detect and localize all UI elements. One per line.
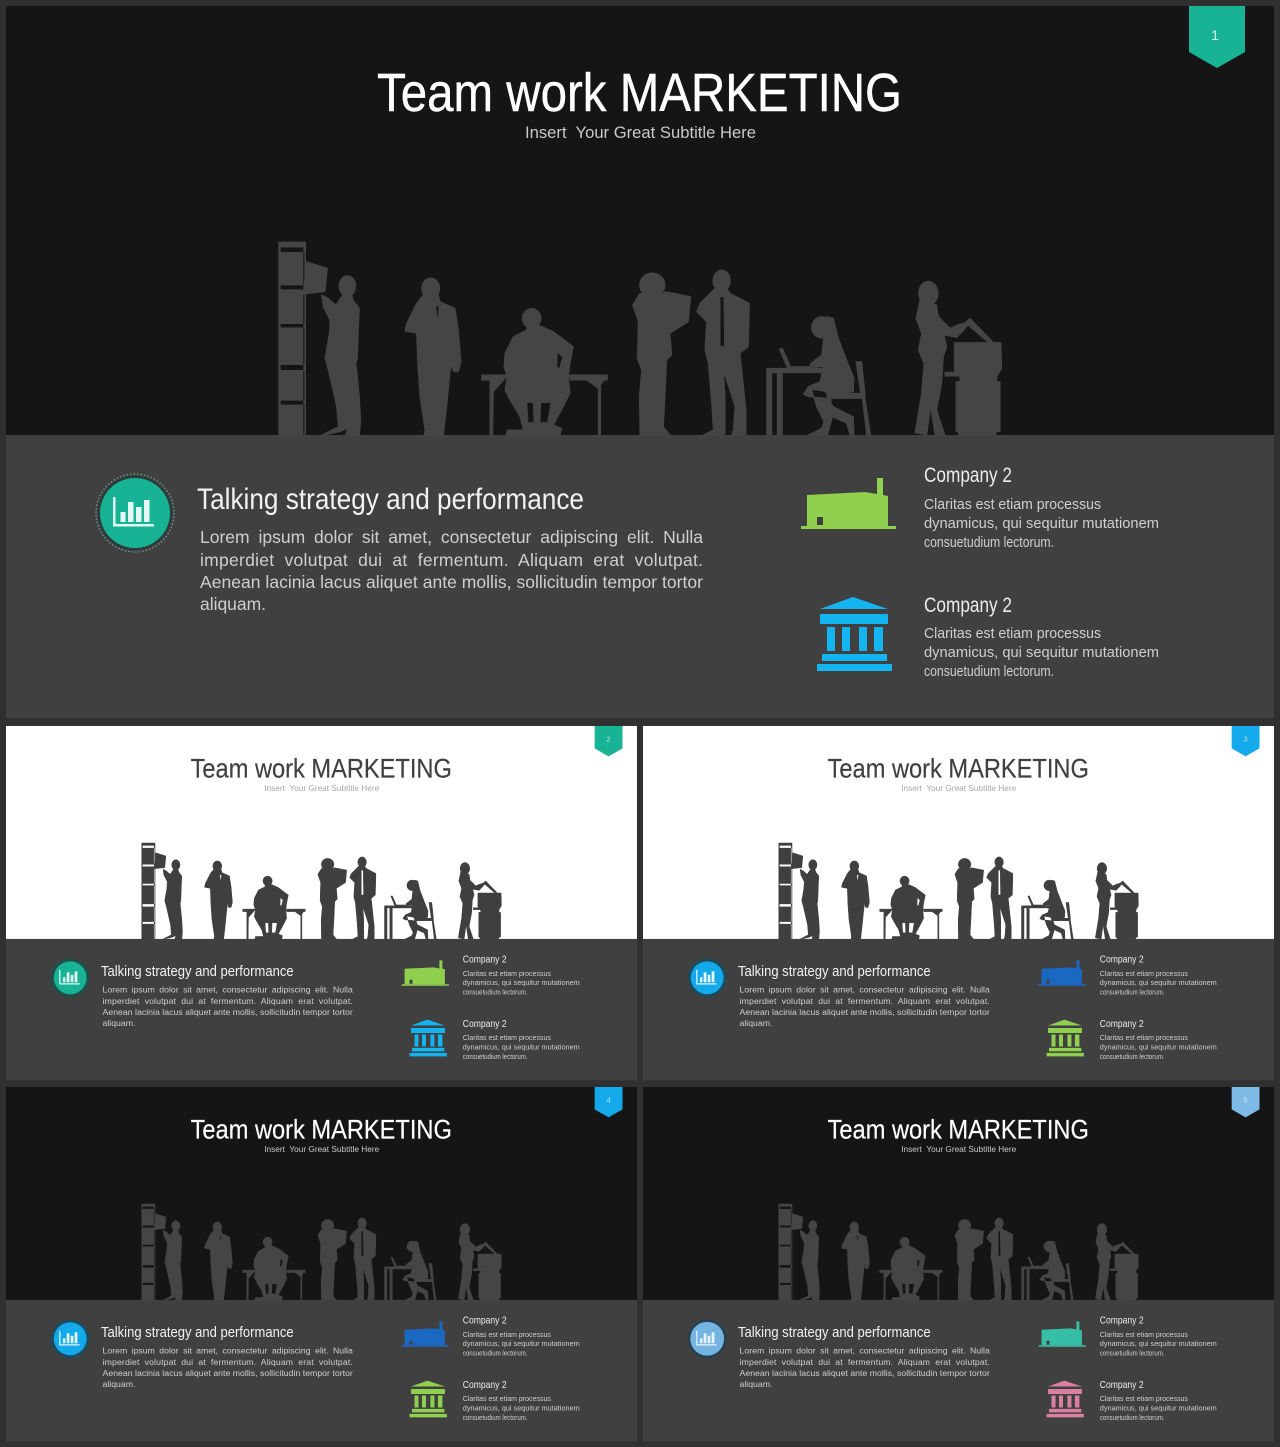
slide 3 company block two: consuetudium lectorum.: [1100, 1052, 1164, 1061]
slide 1 bank icon: [817, 597, 892, 671]
slide 4 office silhouettes: [142, 1204, 501, 1300]
slide 3 chart badge icon: [688, 958, 727, 997]
slide 4 body text: Aenean lacinia lacus aliquet ante mollis, sollicitudin tempor tortor: [103, 1368, 353, 1378]
slide 5 company block two: dynamicus, qui sequitur mutationem: [1100, 1403, 1217, 1412]
slide 1 company block one: [924, 464, 1159, 551]
slide 1 body text: imperdiet volutpat dui at fermentum. Aliquam erat volutpat.: [200, 550, 703, 570]
slide 3 company block one: consuetudium lectorum.: [1100, 988, 1164, 997]
slide 3 body text: aliquam.: [740, 1018, 772, 1028]
slide 4 bank icon: [410, 1381, 447, 1417]
slide 5: dark slide with pastel accent: [643, 1087, 1274, 1441]
slide 1 company block one: Claritas est etiam processus: [924, 496, 1101, 513]
slide 5 company block two: Company 2: [1100, 1380, 1144, 1391]
slide 3 title: Team work MARKETING: [828, 754, 1089, 784]
slide 2 chart badge icon: [51, 958, 90, 997]
slide 3 company block one: Company 2: [1100, 954, 1144, 965]
slide 5 body text: imperdiet volutpat dui at fermentum. Aliquam erat volutpat.: [740, 1357, 990, 1367]
slide 2 body text: aliquam.: [103, 1018, 135, 1028]
slide 1 company block one: dynamicus, qui sequitur mutationem: [924, 515, 1159, 532]
slide 1: large dark slide: [6, 6, 1274, 718]
slide 2 subtitle: Insert Your Great Subtitle Here: [264, 783, 379, 793]
slide 1 heading: Talking strategy and performance: [197, 483, 584, 516]
slide 4 company block one: [463, 1315, 580, 1358]
slide 3 footer panel: [643, 939, 1274, 1080]
slide 3 page number badge: 3: [1244, 736, 1248, 743]
slide 5 company block one: consuetudium lectorum.: [1100, 1349, 1164, 1358]
slide 3 company block two: Claritas est etiam processus: [1100, 1033, 1188, 1042]
slide 3 company block one: [1100, 954, 1217, 997]
slide 5 company block one: dynamicus, qui sequitur mutationem: [1100, 1339, 1217, 1348]
slide 2 company block one: [463, 954, 580, 997]
slide 4 page number badge: [595, 1087, 623, 1117]
slide 2: white slide with teal accent: [6, 726, 637, 1080]
slide 4 footer panel: [6, 1300, 637, 1441]
slide 1 body text: [200, 527, 703, 614]
slide 1 factory icon: [801, 478, 896, 529]
slide 5 factory icon: [1039, 1321, 1086, 1347]
slide 5 company block one: Claritas est etiam processus: [1100, 1330, 1188, 1339]
slide 1 body text: Aenean lacinia lacus aliquet ante mollis, sollicitudin tempor tortor: [200, 572, 703, 592]
slide 2 footer panel: [6, 939, 637, 1080]
slide 5 heading: Talking strategy and performance: [738, 1324, 931, 1341]
slide 3 company block one: Claritas est etiam processus: [1100, 969, 1188, 978]
slide 2 company block one: dynamicus, qui sequitur mutationem: [463, 978, 580, 987]
slide 2 factory icon: [402, 960, 449, 986]
slide 5 dark header background: [643, 1087, 1274, 1300]
slide 4 page number badge: 4: [607, 1097, 611, 1104]
slide 1 company block one: consuetudium lectorum.: [924, 534, 1054, 551]
slide 5 body text: [740, 1346, 990, 1389]
slide 4 company block two: Claritas est etiam processus: [463, 1394, 551, 1403]
slide 2 bank icon: [410, 1020, 447, 1056]
slide 4 body text: Lorem ipsum dolor sit amet, consectetur adipiscing elit. Nulla: [103, 1346, 353, 1356]
slide 5 company block two: Claritas est etiam processus: [1100, 1394, 1188, 1403]
slide 2 heading: Talking strategy and performance: [101, 963, 294, 980]
slide 1 company block two: Company 2: [924, 594, 1012, 617]
slide 1 footer panel: [6, 435, 1274, 718]
slide 2 page number badge: [595, 726, 623, 756]
slide 3 factory icon: [1039, 960, 1086, 986]
slide 3: white slide with blue accent: [643, 726, 1274, 1080]
slide 3 company block two: Company 2: [1100, 1019, 1144, 1030]
slide 3 company block one: dynamicus, qui sequitur mutationem: [1100, 978, 1217, 987]
slide 4 company block two: [463, 1380, 580, 1422]
slide 2 body text: Aenean lacinia lacus aliquet ante mollis, sollicitudin tempor tortor: [103, 1007, 353, 1017]
slide 3 company block two: [1100, 1019, 1217, 1061]
slide 4 company block one: Claritas est etiam processus: [463, 1330, 551, 1339]
slide 3 page number badge: [1232, 726, 1260, 756]
slide 4 body text: [103, 1346, 353, 1389]
slide 4 dark header background: [6, 1087, 637, 1300]
slide 4 company block two: dynamicus, qui sequitur mutationem: [463, 1403, 580, 1412]
slide 3 company block two: dynamicus, qui sequitur mutationem: [1100, 1042, 1217, 1051]
slide 2 company block two: [463, 1019, 580, 1061]
slide 3 white header background: [643, 726, 1274, 939]
slide 3 body text: Aenean lacinia lacus aliquet ante mollis, sollicitudin tempor tortor: [740, 1007, 990, 1017]
slide 5 body text: aliquam.: [740, 1379, 772, 1389]
slide 1 page number badge: [1189, 6, 1245, 68]
slide 4 company block one: consuetudium lectorum.: [463, 1349, 527, 1358]
slide 4 heading: Talking strategy and performance: [101, 1324, 294, 1341]
slide 3 body text: Lorem ipsum dolor sit amet, consectetur adipiscing elit. Nulla: [740, 985, 990, 995]
slide 5 company block one: Company 2: [1100, 1315, 1144, 1326]
slide 4 title: Team work MARKETING: [191, 1115, 452, 1145]
slide 4 body text: aliquam.: [103, 1379, 135, 1389]
slide 2 page number badge: 2: [607, 736, 611, 743]
slide 2 company block one: Company 2: [463, 954, 507, 965]
slide 2 white header background: [6, 726, 637, 939]
slide 2 title: Team work MARKETING: [191, 754, 452, 784]
slide 4 company block two: consuetudium lectorum.: [463, 1413, 527, 1422]
slide 2 company block two: Claritas est etiam processus: [463, 1033, 551, 1042]
slide 2 body text: Lorem ipsum dolor sit amet, consectetur adipiscing elit. Nulla: [103, 985, 353, 995]
slide 2 company block two: dynamicus, qui sequitur mutationem: [463, 1042, 580, 1051]
slide 5 body text: Lorem ipsum dolor sit amet, consectetur adipiscing elit. Nulla: [740, 1346, 990, 1356]
slide 4 company block one: dynamicus, qui sequitur mutationem: [463, 1339, 580, 1348]
slide 4 body text: imperdiet volutpat dui at fermentum. Aliquam erat volutpat.: [103, 1357, 353, 1367]
slide 1 title: Team work MARKETING: [377, 63, 902, 123]
slide 2 body text: imperdiet volutpat dui at fermentum. Aliquam erat volutpat.: [103, 996, 353, 1006]
slide 5 page number badge: [1232, 1087, 1260, 1117]
slide 4 factory icon: [402, 1321, 449, 1347]
slide 3 office silhouettes: [779, 843, 1138, 939]
slide 1 subtitle: Insert Your Great Subtitle Here: [525, 123, 756, 142]
slide 5 subtitle: Insert Your Great Subtitle Here: [901, 1144, 1016, 1154]
slide 1 chart badge icon: [96, 474, 174, 552]
slide 3 body text: [740, 985, 990, 1028]
slide 1 body text: aliquam.: [200, 594, 266, 614]
slide 1 company block two: consuetudium lectorum.: [924, 663, 1054, 680]
slide 5 bank icon: [1047, 1381, 1084, 1417]
slide 2 company block two: consuetudium lectorum.: [463, 1052, 527, 1061]
slide 4 chart badge icon: [51, 1319, 90, 1358]
slide 3 body text: imperdiet volutpat dui at fermentum. Aliquam erat volutpat.: [740, 996, 990, 1006]
slide 5 company block one: [1100, 1315, 1217, 1358]
slide 2 company block one: consuetudium lectorum.: [463, 988, 527, 997]
slide 5 footer panel: [643, 1300, 1274, 1441]
slide 5 company block two: [1100, 1380, 1217, 1422]
slide 5 title: Team work MARKETING: [828, 1115, 1089, 1145]
slide 1 dark header background: [6, 6, 1274, 435]
slide 2 office silhouettes: [142, 843, 501, 939]
slide 4 company block one: Company 2: [463, 1315, 507, 1326]
slide 4: dark slide with blue accent: [6, 1087, 637, 1441]
slide 1 company block two: [924, 594, 1159, 680]
slide 1 company block one: Company 2: [924, 464, 1012, 487]
slide 3 subtitle: Insert Your Great Subtitle Here: [901, 783, 1016, 793]
slide 5 company block two: consuetudium lectorum.: [1100, 1413, 1164, 1422]
slide 2 company block two: Company 2: [463, 1019, 507, 1030]
slide 3 bank icon: [1047, 1020, 1084, 1056]
slide 4 company block two: Company 2: [463, 1380, 507, 1391]
slide 1 body text: Lorem ipsum dolor sit amet, consectetur adipiscing elit. Nulla: [200, 527, 703, 547]
slide 2 company block one: Claritas est etiam processus: [463, 969, 551, 978]
slide 5 body text: Aenean lacinia lacus aliquet ante mollis, sollicitudin tempor tortor: [740, 1368, 990, 1378]
slide 4 subtitle: Insert Your Great Subtitle Here: [264, 1144, 379, 1154]
slide 2 body text: [103, 985, 353, 1028]
slide 1 company block two: dynamicus, qui sequitur mutationem: [924, 644, 1159, 661]
slide 1 company block two: Claritas est etiam processus: [924, 625, 1101, 642]
slide 1 office silhouettes: [278, 242, 1002, 436]
slide 5 office silhouettes: [779, 1204, 1138, 1300]
slide 5 page number badge: 5: [1244, 1097, 1248, 1104]
slide 1 page number badge: 1: [1211, 27, 1219, 43]
slide 5 chart badge icon: [688, 1319, 727, 1358]
slide 3 heading: Talking strategy and performance: [738, 963, 931, 980]
